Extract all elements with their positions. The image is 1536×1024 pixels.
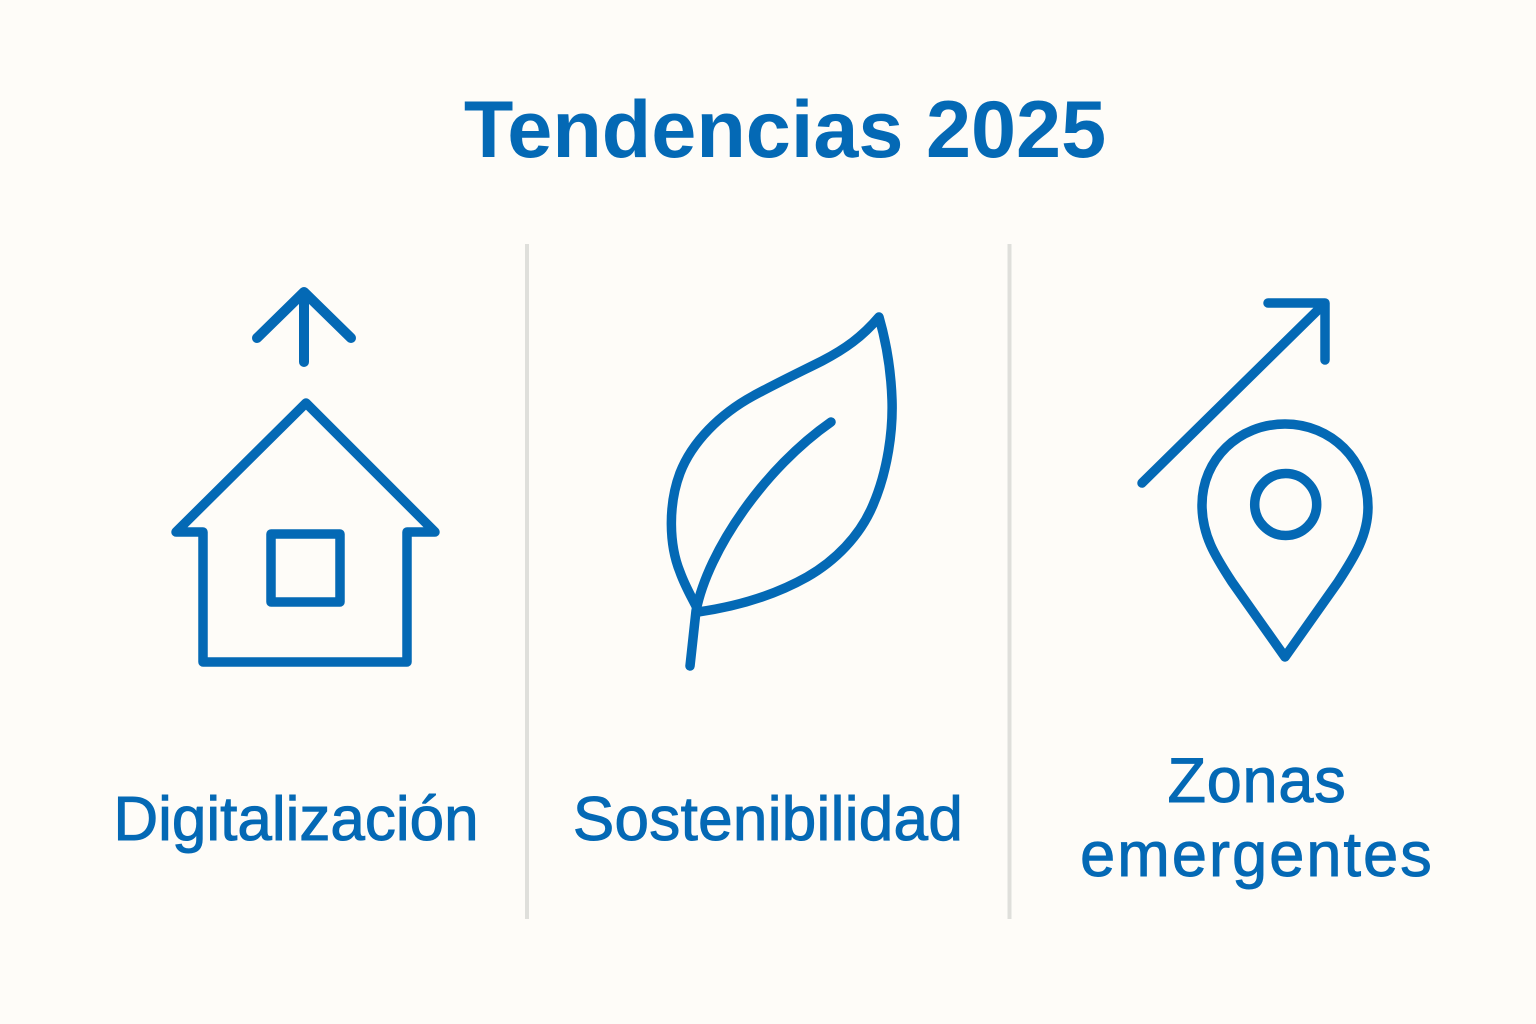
icon: location pin with diagonal arrow (1142, 303, 1368, 657)
label: Zonas emergentes: emergentes (1080, 820, 1434, 890)
icon: house with up arrow (176, 292, 435, 662)
label: Sostenibilidad: Sostenibilidad (573, 785, 963, 854)
label: Zonas emergentes: Zonas (1167, 746, 1347, 816)
label: Zonas emergentes (1080, 746, 1434, 890)
icon: leaf (671, 317, 892, 666)
title: Tendencias 2025 (464, 85, 1106, 175)
label: Digitalización: Digitalización (113, 785, 479, 854)
